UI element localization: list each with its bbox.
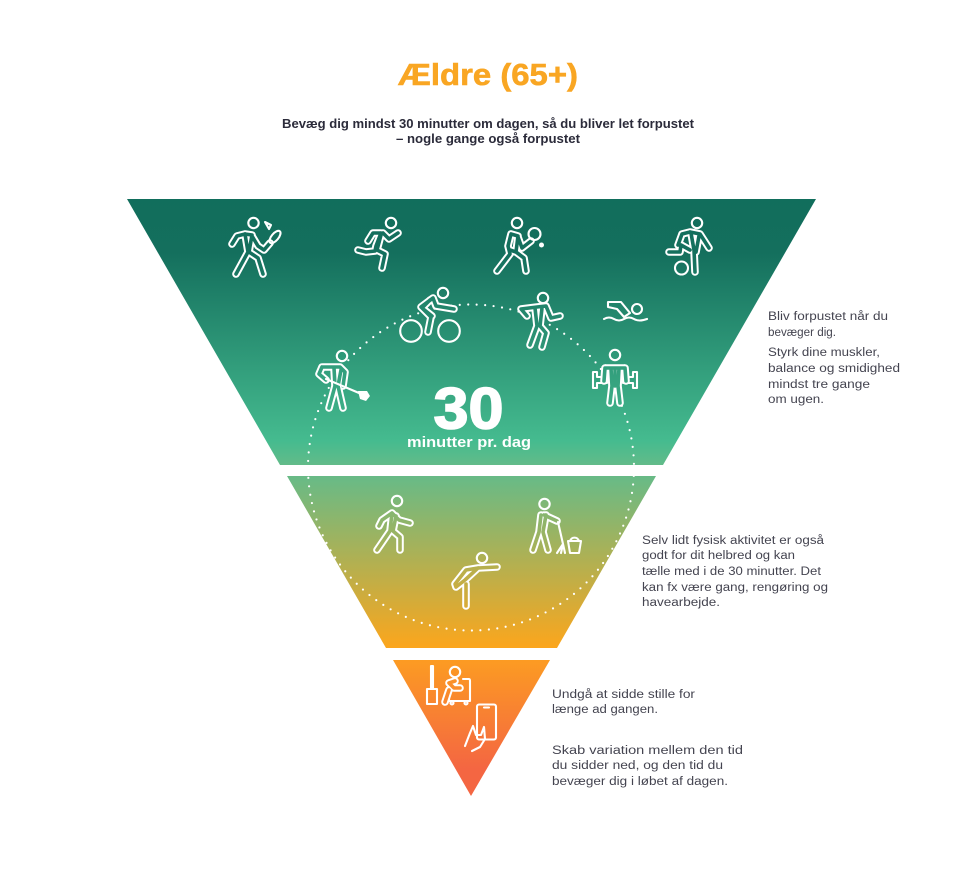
text block: bliv forpustet — [768, 311, 900, 406]
label: minutter pr. dag: minutter pr. dag — [407, 435, 531, 451]
icon: tennis player — [497, 218, 544, 271]
text block: lidt fysisk aktivitet: kan fx være gang, rengøring og — [642, 582, 828, 594]
text block: undgå at sidde stille — [552, 689, 743, 788]
icon: dancer — [521, 293, 560, 347]
text block: lidt fysisk aktivitet: havearbejde. — [642, 597, 720, 609]
text block: bliv forpustet: mindst tre gange — [768, 379, 870, 391]
text block: lidt fysisk aktivitet: tælle med i de 30 minutter. Det — [642, 566, 822, 578]
text block: undgå at sidde stille: bevæger dig i løbet af dagen. — [552, 776, 728, 788]
text block: bliv forpustet: Styrk dine muskler, — [768, 347, 880, 359]
icon: weight lifter — [593, 350, 637, 403]
icon: swimmer — [604, 302, 647, 320]
text block: bliv forpustet: balance og smidighed — [768, 363, 900, 375]
icon: cyclist — [400, 288, 460, 342]
text block: bliv forpustet: bevæger dig. — [768, 327, 836, 339]
text block: undgå at sidde stille: Undgå at sidde stille for — [552, 689, 695, 701]
title: Ældre (65+) — [398, 57, 578, 92]
text block: undgå at sidde stille: Skab variation mellem den tid — [552, 745, 743, 757]
big number 30: 30 — [434, 376, 504, 442]
icon: badminton — [232, 218, 283, 274]
text block: lidt fysisk aktivitet — [642, 535, 828, 609]
panel: pyramid bottom section — [393, 660, 550, 796]
text block: undgå at sidde stille: længe ad gangen. — [552, 704, 658, 716]
text block: bliv forpustet: om ugen. — [768, 394, 824, 406]
dotted 30 minute circle — [308, 304, 634, 630]
icon: person shoveling — [319, 351, 370, 408]
text block: lidt fysisk aktivitet: godt for dit helbred og kan — [642, 550, 795, 562]
text block: undgå at sidde stille: du sidder ned, og den tid du — [552, 760, 723, 772]
subtitle: – nogle gange også forpustet — [396, 132, 581, 146]
icon: runner — [358, 218, 398, 268]
icon: football player — [669, 218, 709, 274]
icon: balancing person — [455, 553, 497, 606]
panel: pyramid middle section — [287, 476, 656, 648]
text block: bliv forpustet: Bliv forpustet når du — [768, 311, 888, 323]
icon: hand holding phone — [465, 704, 496, 751]
subtitle — [282, 117, 695, 146]
panel: pyramid top section — [127, 199, 816, 465]
icon: person raking with bucket — [533, 499, 581, 553]
text block: lidt fysisk aktivitet: Selv lidt fysisk aktivitet er også — [642, 535, 825, 547]
subtitle: Bevæg dig mindst 30 minutter om dagen, så du bliver let forpustet — [282, 117, 695, 131]
icon: walker — [377, 496, 410, 550]
icon: person sitting in chair with remote — [427, 666, 470, 704]
